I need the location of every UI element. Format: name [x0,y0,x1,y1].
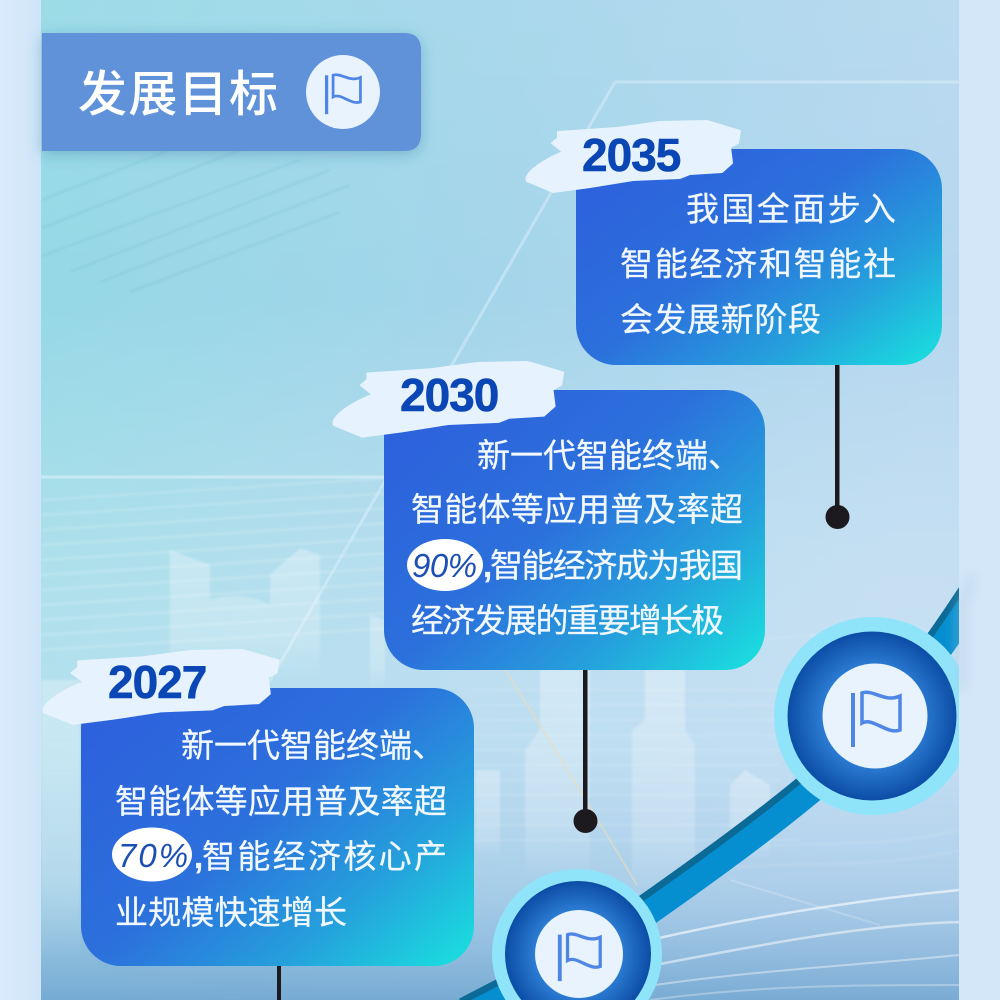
body text 2030: 新一代智能终端、 [477,437,741,474]
highlight 70% [112,828,192,882]
year tag 2027 [44,650,279,724]
body text 2030: 智能经济成为我国 [490,547,743,584]
connector 2030 [574,670,598,833]
year tag 2035 [526,121,740,192]
milestone circle: lower [492,869,662,1000]
connector 2035 [826,365,850,529]
background grid lines [41,82,959,715]
icon: header flag [306,55,380,129]
heading text: 发展目标 [78,68,278,122]
panel: 2030 [334,362,765,670]
body text 2027 [115,727,447,931]
year tag 2030: 2030 [400,369,498,421]
body text 2027: 新一代智能终端、 [181,727,445,764]
icon: flag [853,692,900,747]
faint yellow diagonal [505,670,637,885]
body text 2035 [620,190,896,338]
year tag 2027: 2027 [108,656,206,708]
milestone circle: upper [774,617,972,815]
icon: flag [560,934,600,981]
growth curve road [466,590,978,1000]
left margin [0,0,41,1000]
body text 2035: 智能经济和智能社 [620,246,896,282]
body text 2027: , [194,838,203,875]
body text 2030: 智能体等应用普及率超 [411,491,743,528]
highlight 90%: 90% [412,547,477,584]
highlight 90% [407,539,483,591]
body text 2030: , [483,547,492,584]
connector 2027 [277,966,281,1000]
body text 2035: 我国全面步入 [686,190,896,228]
year tag 2035: 2035 [582,129,681,181]
header: 发展目标 [42,33,421,151]
year tag 2030 [334,362,563,437]
city skyline [41,548,770,960]
body text 2027: 业规模快速增长 [115,894,347,931]
body text 2027: 智能经济核心产 [202,838,447,875]
panel: 2035 [526,121,942,365]
body text 2027: 智能体等应用普及率超 [115,783,447,820]
background stripes [43,158,384,650]
body text 2030: 经济发展的重要增长极 [411,602,724,639]
body text 2035: 会发展新阶段 [620,301,821,338]
right margin [959,0,1000,1000]
panel: 2027 [44,650,474,966]
bottom light streaks [650,880,959,1000]
body text 2030 [411,437,743,639]
highlight 70%: 70% [118,837,190,874]
